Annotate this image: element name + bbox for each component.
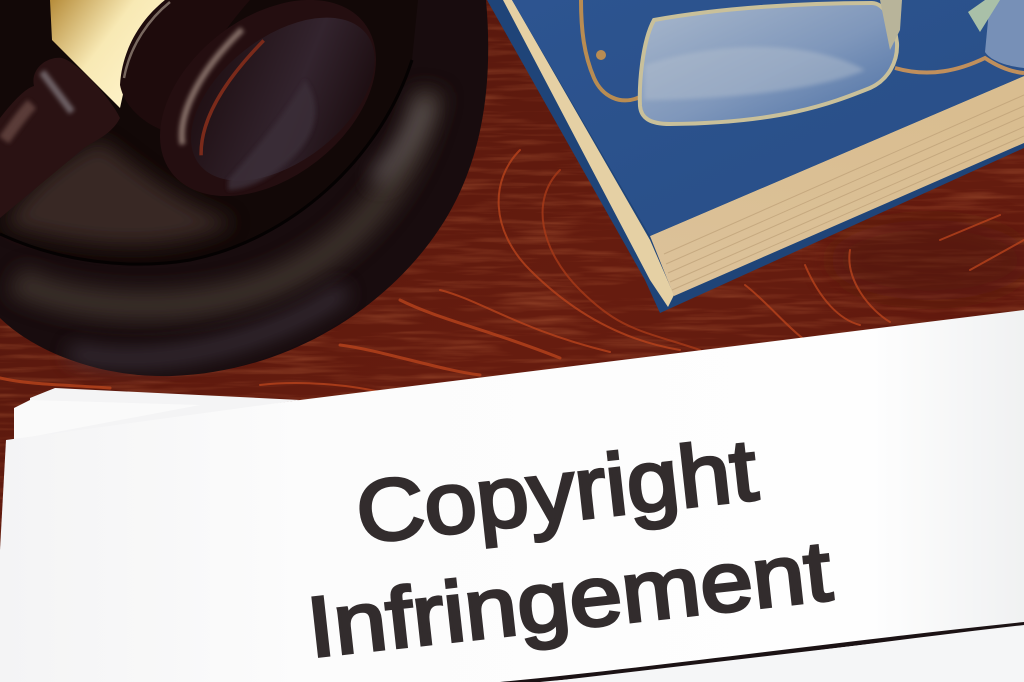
- gavel face: [123, 0, 413, 236]
- page block: [650, 76, 1024, 296]
- gavel: [0, 0, 413, 236]
- back cover: [487, 0, 1024, 313]
- cream page edge: [503, 0, 674, 307]
- gavel head: [120, 0, 250, 135]
- book: [487, 0, 1024, 313]
- gavel handle: [0, 58, 120, 218]
- sound block: [0, 0, 488, 376]
- grey background corner: [0, 0, 70, 130]
- block top surface: [0, 0, 418, 264]
- glasses temple arm: [581, 0, 640, 100]
- wooden table background: [0, 6, 1024, 543]
- front sheet: [0, 310, 1024, 682]
- glasses bridge: [895, 58, 1024, 73]
- right lens: [985, 0, 1024, 68]
- sheet shadow line: [500, 622, 1024, 682]
- left lens: [640, 3, 897, 124]
- rear sheets: [30, 388, 300, 440]
- paper stack: [0, 310, 1024, 682]
- heading: Copyright: Copyright: [351, 421, 762, 562]
- front cover: [512, 0, 1024, 236]
- eyeglasses: [581, 0, 1024, 124]
- heading: Infringement: Infringement: [303, 524, 836, 676]
- gavel brass collar: [50, 0, 165, 108]
